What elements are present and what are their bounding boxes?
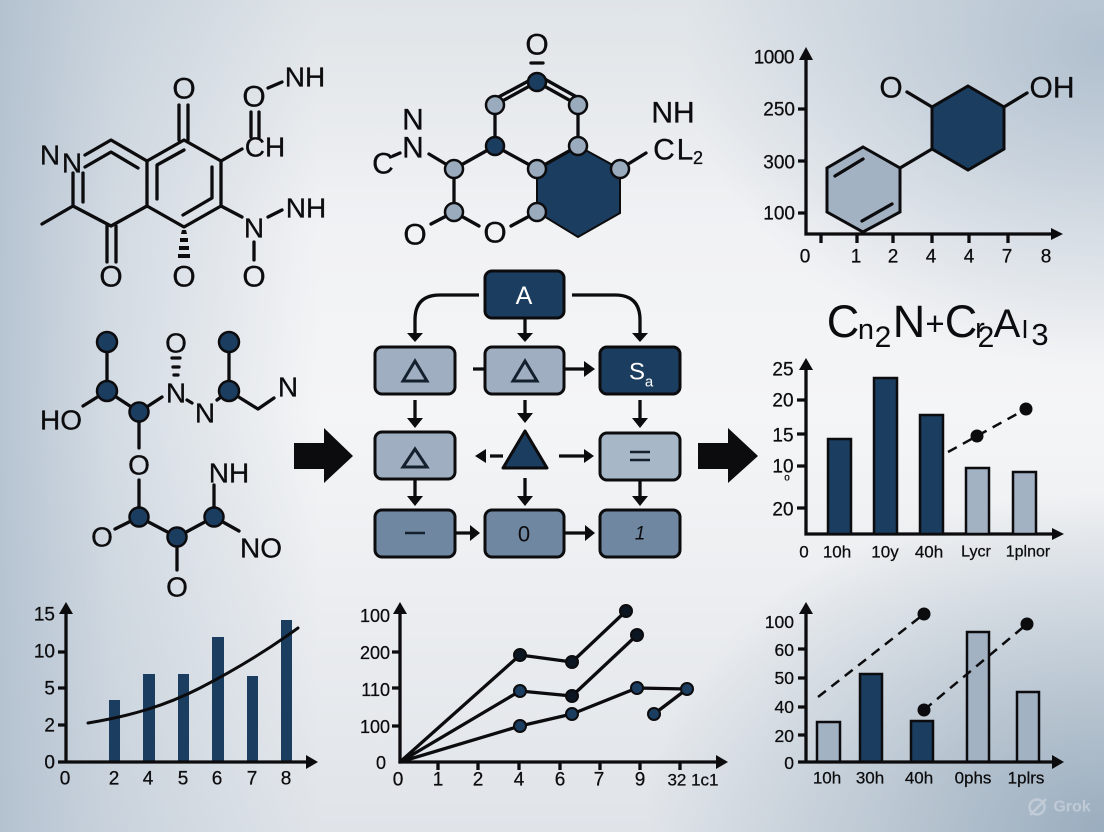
line chart: bottom centre: 2: [473, 770, 483, 790]
formula heading: [827, 296, 1049, 354]
molecule: top left fused rings: N: [40, 140, 60, 170]
bar chart with curve: bottom left: 2: [44, 716, 55, 736]
formula heading: n: [858, 314, 874, 346]
molecule: top left fused rings: O: [99, 260, 123, 294]
chart: molecule over axes top right: 300: [763, 152, 795, 174]
bar chart: middle right: 40h: [915, 542, 943, 562]
molecule: top centre with node atoms: L: [677, 134, 693, 166]
molecule: top left fused rings: O: [172, 260, 196, 294]
line chart: bottom centre: 0: [376, 753, 386, 773]
line chart: bottom centre: 100: [360, 717, 390, 737]
bar chart with curve: bottom left: 5: [44, 678, 55, 700]
bar chart: middle right: 10h: [823, 542, 851, 562]
chart: molecule over axes top right: OH: [1030, 72, 1074, 104]
molecule: middle left chain: NH: [209, 458, 249, 488]
triangle node: [503, 431, 547, 468]
bar chart with dashed lines: bottom right: 10h: [813, 768, 841, 788]
arrow: centre to right: [698, 428, 758, 483]
formula heading: 2: [875, 321, 891, 354]
bar chart: middle right: 20: [772, 390, 794, 412]
bar chart: middle right: 0: [799, 542, 809, 562]
formula heading: +: [925, 305, 945, 342]
bar chart with dashed lines: bottom right: 1plrs: [1008, 768, 1044, 788]
chart: molecule over axes top right: [754, 47, 1074, 268]
molecule: middle left chain: O: [166, 572, 188, 602]
molecule: top left fused rings: CH: [245, 132, 285, 162]
molecule: middle left chain: O: [91, 522, 113, 552]
box minus: [375, 510, 455, 557]
box A: A: [516, 282, 533, 310]
bar chart with dashed lines: bottom right: 60: [775, 640, 794, 660]
line chart: bottom centre: 1: [433, 770, 443, 790]
line chart: bottom centre: 32 1c1: [667, 770, 719, 790]
molecule: middle left chain: O: [165, 328, 187, 358]
box A: [485, 271, 564, 318]
watermark: Grok: Grok: [1053, 798, 1091, 816]
molecule: top centre with node atoms: C: [372, 148, 394, 180]
molecule: top left fused rings: N: [244, 212, 264, 244]
line chart: bottom centre: 6: [555, 770, 565, 790]
box equals: [600, 433, 680, 480]
bar chart with curve: bottom left: [34, 602, 318, 790]
molecule: top centre with node atoms: O: [483, 216, 507, 250]
molecule: middle left chain: HO: [40, 404, 82, 436]
formula heading: 3: [1031, 317, 1049, 352]
bar chart with dashed lines: bottom right: 40: [775, 697, 794, 717]
molecule: middle left chain: NO: [240, 532, 282, 564]
chart: molecule over axes top right: 1: [851, 246, 861, 268]
flowchart: [375, 271, 680, 557]
bar chart with dashed lines: bottom right: 50: [775, 668, 794, 688]
line chart: bottom centre: 200: [360, 643, 390, 663]
molecule: top left fused rings: NH: [286, 192, 326, 224]
chart: molecule over axes top right: 7: [1002, 246, 1012, 268]
bar chart with curve: bottom left: 0: [60, 768, 70, 790]
formula heading: r: [975, 313, 985, 345]
bar chart: middle right: 1plnor: [1006, 544, 1051, 560]
chart: molecule over axes top right: 0: [800, 246, 810, 268]
molecule: top centre with node atoms: N: [402, 132, 424, 164]
bar chart with curve: bottom left: 6: [212, 768, 222, 790]
bar chart with curve: bottom left: 15: [34, 604, 55, 626]
box zero: [485, 510, 564, 557]
box Sa: S: [629, 358, 645, 386]
formula heading: N: [893, 296, 925, 347]
bar chart with dashed lines: bottom right: [765, 602, 1064, 788]
molecule: top left fused rings: O: [242, 80, 266, 114]
molecule: top centre with node atoms: O: [403, 218, 427, 252]
bar chart with dashed lines: bottom right: 0phs: [955, 768, 991, 788]
line chart: bottom centre: 9: [635, 770, 645, 790]
formula heading: 2: [978, 321, 994, 354]
molecule: top centre with node atoms: N: [402, 104, 424, 136]
box Sa: a: [645, 374, 654, 390]
line chart: bottom centre: 7: [594, 770, 604, 790]
molecule: middle left chain: O: [128, 450, 150, 480]
line chart: bottom centre: 100: [360, 606, 390, 626]
box triangle centre: [485, 347, 564, 394]
line chart: bottom centre: [360, 602, 728, 790]
bar chart with curve: bottom left: 4: [143, 768, 154, 790]
chart: molecule over axes top right: 250: [763, 100, 795, 120]
box triangle left: [375, 347, 455, 394]
line chart: bottom centre: 4: [514, 770, 525, 790]
bar chart with curve: bottom left: 0: [44, 752, 55, 774]
molecule: top centre with node atoms: [372, 28, 703, 252]
formula heading: A: [994, 302, 1021, 346]
box one: 1: [635, 524, 645, 544]
bar chart with dashed lines: bottom right: 100: [765, 612, 794, 632]
formula heading: C: [827, 296, 859, 347]
molecule: top centre with node atoms: O: [525, 28, 549, 62]
box triangle row 3: [375, 432, 455, 479]
bar chart with dashed lines: bottom right: 0: [784, 753, 794, 773]
bar chart: middle right: o: [784, 472, 790, 484]
chart: molecule over axes top right: 4: [964, 246, 975, 268]
formula heading: I: [1021, 314, 1029, 344]
molecule: top centre with node atoms: NH: [651, 96, 695, 130]
chart: molecule over axes top right: O: [879, 72, 903, 104]
chart: molecule over axes top right: 100: [763, 204, 795, 224]
flow connectors: [407, 295, 648, 541]
box zero: 0: [518, 522, 530, 546]
molecule: middle left chain: [40, 328, 298, 602]
molecule: middle left chain: N: [195, 398, 215, 428]
bar chart: middle right: 10: [772, 456, 794, 478]
bar chart: middle right: 25: [772, 360, 794, 380]
bar chart with curve: bottom left: 5: [178, 768, 188, 790]
bar chart with dashed lines: bottom right: 40h: [905, 768, 933, 788]
chart: molecule over axes top right: 1000: [754, 48, 794, 68]
watermark: Grok: [1030, 798, 1091, 816]
bar chart with curve: bottom left: 10: [34, 642, 55, 662]
line chart: bottom centre: 110: [361, 680, 390, 700]
bar chart: middle right: 15: [772, 426, 794, 446]
molecule: top left fused rings: N: [62, 148, 82, 178]
bar chart with curve: bottom left: 7: [247, 768, 257, 790]
bar chart: middle right: [772, 358, 1064, 562]
molecule: middle left chain: N: [278, 372, 298, 402]
bar chart with dashed lines: bottom right: 20: [775, 726, 794, 746]
bar chart: middle right: 20: [772, 500, 794, 520]
molecule: top centre with node atoms: C: [653, 134, 675, 166]
formula heading: C: [945, 296, 977, 347]
molecule: top left fused rings: [40, 62, 326, 294]
arrow: left to centre: [294, 428, 353, 483]
bar chart with dashed lines: bottom right: 30h: [856, 768, 884, 788]
molecule: top left fused rings: NH: [285, 62, 325, 92]
bar chart: middle right: 10y: [871, 542, 899, 562]
molecule: top centre with node atoms: 2: [693, 148, 703, 168]
molecule: top left fused rings: O: [242, 260, 266, 294]
box Sa: [600, 347, 680, 394]
chart: molecule over axes top right: 2: [888, 246, 898, 268]
molecule: middle left chain: N: [166, 378, 186, 408]
chart: molecule over axes top right: 4: [926, 246, 937, 268]
bar chart with curve: bottom left: 2: [109, 768, 119, 790]
bar chart with curve: bottom left: 8: [281, 768, 291, 790]
molecule: top left fused rings: O: [172, 72, 196, 106]
box one: [600, 510, 680, 557]
line chart: bottom centre: 0: [393, 770, 403, 790]
bar chart: middle right: Lycr: [961, 544, 991, 560]
chart: molecule over axes top right: 8: [1041, 246, 1051, 268]
